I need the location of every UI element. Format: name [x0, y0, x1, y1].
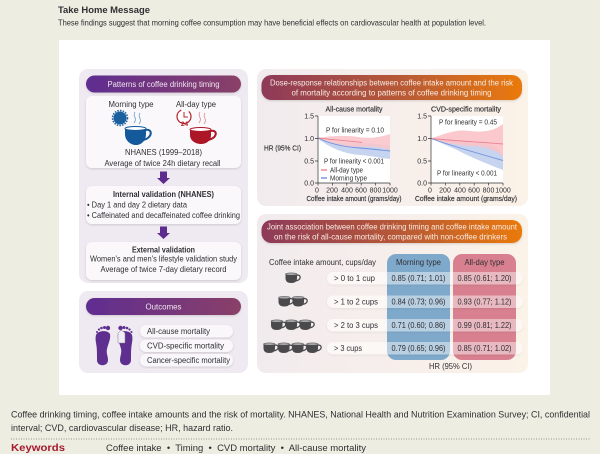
heading pill: dose-response: of mortality according to patterns of coffee drinking timing — [292, 88, 492, 98]
row: more than 1 to 2 cups: 0.93 (0.77; 1.12) — [458, 298, 512, 306]
x tick labels: 800 — [370, 188, 381, 194]
caption — [11, 410, 590, 434]
caption: interval; CVD, cardiovascular disease; HR, hazard ratio. — [11, 423, 233, 434]
x tick labels: 400 — [454, 188, 466, 194]
x tick labels — [428, 188, 511, 194]
card: internal validation — [86, 186, 241, 224]
heading pill: outcomes — [86, 298, 241, 315]
line: morning type — [318, 138, 390, 151]
row: more than 3 cups: 0.79 (0.65; 0.96) — [392, 344, 446, 353]
y tick labels: 0.0 — [304, 180, 314, 188]
row: more than 1 to 2 cups — [278, 296, 523, 308]
icons: four cups — [263, 343, 321, 353]
x tick labels: 800 — [483, 188, 494, 194]
line: all-day type — [318, 138, 362, 142]
legend — [321, 168, 367, 182]
chip: cancer-specific mortality: Cancer-specific mortality — [147, 356, 230, 365]
x tick labels: 0 — [315, 188, 319, 194]
legend: Morning type — [330, 176, 367, 182]
y tick labels: 1.5 — [304, 114, 314, 120]
card: internal validation: Internal validation (NHANES) — [113, 190, 214, 199]
heading pill: patterns — [86, 76, 241, 92]
axes — [315, 116, 390, 186]
arrow: to internal validation — [157, 172, 170, 184]
panel: dose-response relationships — [257, 69, 528, 206]
x axis title: Coffee intake amount (grams/day) — [415, 194, 517, 203]
keywords list: Coffee intake • Timing • CVD mortality • All-cause mortality — [106, 443, 366, 454]
card: internal validation: • Day 1 and day 2 dietary data — [87, 200, 188, 210]
table header: cups per day: Coffee intake amount, cups/day — [269, 258, 376, 267]
text: take home summary: These findings suggest that morning coffee consumption may have beneficial effects on cardiovascular health at population level. — [58, 18, 486, 28]
axes — [428, 116, 503, 186]
card: external validation: Average of twice 7-day dietary record — [100, 265, 226, 274]
y tick labels: 1.5 — [417, 114, 427, 120]
chart title: CVD-specific mortality — [431, 106, 501, 114]
icon: blue steam — [134, 112, 140, 124]
y tick labels — [304, 114, 314, 188]
column: all-day type: All-day type — [464, 258, 505, 267]
chip: all-cause mortality — [140, 325, 233, 338]
keywords heading: Keywords — [11, 443, 65, 454]
row: more than 0 to 1 cup: 0.85 (0.61; 1.20) — [458, 274, 512, 283]
row: more than 2 to 3 cups: 0.71 (0.60; 0.86) — [392, 321, 446, 330]
panel: patterns of coffee drinking timing — [79, 69, 248, 283]
y tick labels: 0.5 — [304, 158, 314, 166]
axis label: HR: HR (95% CI) — [264, 144, 301, 152]
x tick labels: 1000 — [382, 188, 398, 194]
text: p for linearity morning: P for linearity < 0.001 — [437, 170, 497, 178]
heading pill: joint association — [262, 220, 522, 243]
x tick labels: 200 — [326, 188, 338, 194]
row: more than 3 cups — [263, 342, 523, 354]
white figure panel — [59, 40, 550, 395]
icon: red steam — [199, 112, 205, 124]
heading pill: patterns: Patterns of coffee drinking timing — [108, 80, 220, 89]
icon: 24 hour clock — [177, 110, 191, 128]
row: more than 2 to 3 cups: > 2 to 3 cups — [334, 321, 378, 330]
text: dietary recall: Average of twice 24h dietary recall — [104, 159, 221, 168]
card: external validation: External validation — [132, 246, 195, 254]
panel: joint association — [257, 214, 528, 373]
text: p for linearity all-day: P for linearity = 0.10 — [326, 128, 384, 134]
heading pill: dose-response — [262, 75, 522, 100]
card: NHANES — [86, 96, 241, 168]
column: morning type — [387, 254, 450, 360]
y tick labels: 0.0 — [417, 180, 427, 188]
row: more than 3 cups: 0.85 (0.71; 1.02) — [458, 344, 512, 353]
chip: cancer-specific mortality — [140, 354, 233, 366]
icons: three cups — [271, 320, 314, 330]
icons: two cups — [278, 296, 307, 306]
x tick labels: 600 — [355, 188, 367, 194]
y tick labels: 1.0 — [304, 136, 314, 143]
heading pill: joint association: Joint association between coffee drinking timing and coffee intake amount — [267, 222, 518, 232]
row: more than 0 to 1 cup: > 0 to 1 cup — [334, 274, 376, 283]
card: external validation: Women's and men's lifestyle validation study — [90, 254, 237, 264]
icon: feet with toe tag — [96, 326, 132, 365]
row: more than 2 to 3 cups — [271, 319, 523, 332]
x tick labels: 400 — [341, 188, 353, 194]
panel: outcomes — [79, 291, 248, 373]
x tick labels: 600 — [468, 188, 480, 194]
icon: red coffee cup — [190, 128, 216, 144]
x tick labels: 0 — [428, 188, 432, 194]
x tick labels — [315, 188, 398, 194]
text: NHANES years: NHANES (1999–2018) — [125, 148, 202, 157]
chart title: All-cause mortality — [326, 106, 383, 114]
line: morning type — [431, 138, 503, 160]
column: morning type: Morning type — [396, 258, 442, 267]
band: all-day type CI — [318, 134, 390, 150]
x tick labels: 200 — [439, 188, 451, 194]
table footer: HR: HR (95% CI) — [429, 362, 472, 371]
row: more than 0 to 1 cup — [285, 272, 523, 284]
row: more than 1 to 2 cups: 0.84 (0.73; 0.96) — [392, 298, 446, 306]
chart: all-cause mortality — [304, 106, 402, 203]
chip: all-cause mortality: All-cause mortality — [147, 327, 210, 336]
icons: one cup — [285, 273, 300, 283]
column: all-day type — [453, 254, 516, 360]
label: morning type: Morning type — [108, 100, 154, 109]
arrow: to external validation — [157, 226, 170, 239]
band: morning type CI — [431, 138, 503, 170]
chip: CVD-specific mortality — [140, 340, 233, 352]
legend: All-day type — [330, 168, 363, 174]
heading pill: dose-response: Dose-response relationships between coffee intake amount and the risk — [270, 78, 514, 88]
band: all-day type CI — [431, 124, 503, 156]
text: p for linearity morning: P for linearity < 0.001 — [324, 158, 384, 166]
y tick labels: 0.5 — [417, 158, 427, 166]
chip: CVD-specific mortality: CVD-specific mortality — [147, 342, 224, 350]
row: more than 2 to 3 cups: 0.99 (0.81; 1.22) — [458, 321, 512, 330]
y tick labels: 1.0 — [417, 136, 427, 143]
icon: 24 hour clock: 24 — [181, 121, 188, 128]
card: internal validation: • Caffeinated and decaffeinated coffee drinking — [87, 211, 240, 220]
text: p for linearity all-day: P for linearity = 0.45 — [439, 120, 497, 126]
x tick labels: 1000 — [495, 188, 511, 194]
line: all-day type — [431, 138, 503, 144]
label: all-day type: All-day type — [176, 100, 217, 109]
icon: sun — [112, 110, 128, 126]
x axis title: Coffee intake amount (grams/day) — [306, 194, 402, 203]
band: morning type CI — [318, 138, 390, 159]
heading pill: joint association: on the risk of all-cause mortality, compared with non-coffee drinkers — [274, 232, 507, 242]
row: more than 1 to 2 cups: > 1 to 2 cups — [334, 298, 378, 306]
icon: blue coffee cup — [125, 126, 151, 145]
chart: CVD-specific mortality — [415, 106, 517, 203]
row: more than 0 to 1 cup: 0.85 (0.71; 1.01) — [392, 274, 446, 283]
heading pill: outcomes: Outcomes — [146, 302, 182, 312]
y tick labels — [417, 114, 427, 188]
row: more than 3 cups: > 3 cups — [334, 344, 362, 353]
card: external validation — [86, 242, 241, 280]
heading: take home message: Take Home Message — [58, 5, 150, 16]
